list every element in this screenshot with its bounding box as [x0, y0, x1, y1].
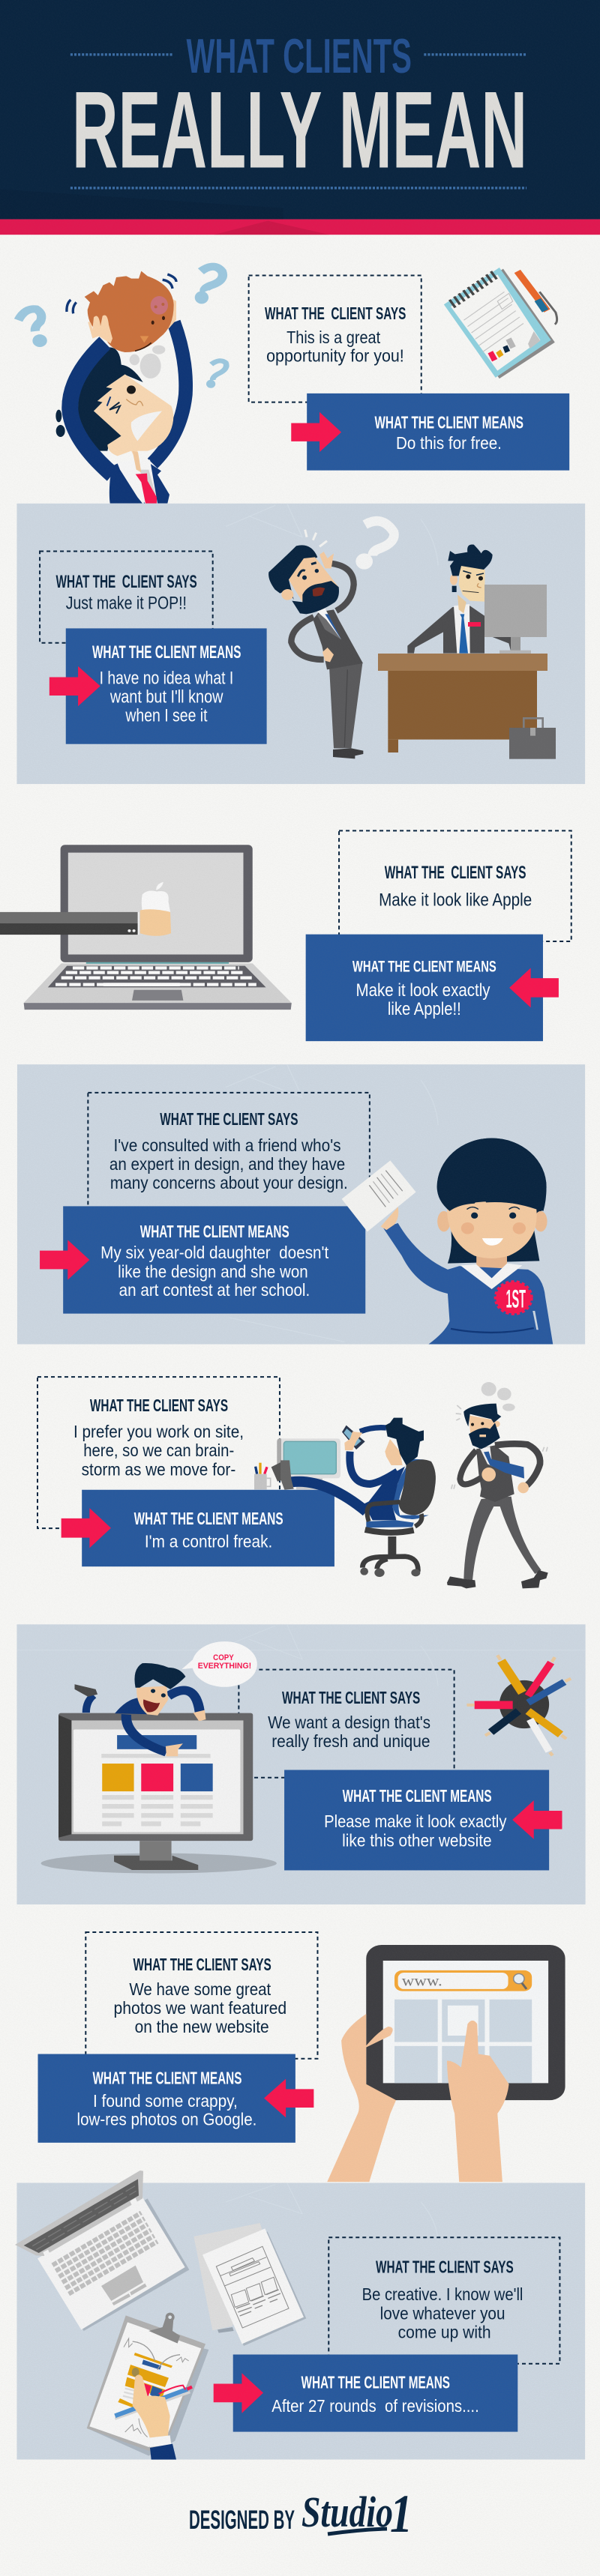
says box	[339, 830, 572, 941]
means box: I found some crappy,	[93, 2092, 238, 2111]
means box: WHAT THE CLIENT MEANS	[352, 957, 496, 975]
says text	[268, 1689, 430, 1752]
says box	[249, 275, 422, 402]
says text: many concerns about your design.	[110, 1174, 348, 1193]
means box: I have no idea what I	[100, 669, 233, 688]
says text: WHAT THE CLIENT SAYS	[265, 304, 406, 323]
means box: WHAT THE CLIENT MEANS	[343, 1786, 492, 1806]
says box	[86, 1932, 317, 2059]
means box	[38, 2054, 296, 2143]
says text: I prefer you work on site,	[74, 1423, 244, 1442]
says text	[110, 1110, 348, 1193]
designed by text: DESIGNED BY	[189, 2506, 295, 2535]
illustration: girl holding drawing	[342, 1138, 553, 1345]
means box: I'm a control freak.	[145, 1533, 272, 1551]
means box: when I see it	[125, 706, 208, 726]
panel 7: great photos	[38, 1932, 566, 2182]
logo: studio1: 1	[390, 2484, 412, 2544]
illustration: laptop with apple	[0, 845, 292, 1010]
means box: My six year-old daughter doesn't	[100, 1243, 328, 1263]
panel 5: work on site	[38, 1377, 334, 1566]
says text: photos we want featured	[114, 1998, 286, 2018]
speech bubble: copy everything: COPY	[213, 1654, 234, 1662]
panel 3: make it look like apple	[0, 830, 572, 1041]
says box	[328, 2237, 560, 2364]
says text: come up with	[398, 2323, 491, 2342]
means box	[284, 1770, 549, 1870]
illustration: man with feet on desk	[254, 1418, 436, 1577]
header banner	[0, 0, 600, 235]
says box	[238, 1670, 454, 1778]
says text: WHAT THE CLIENT SAYS	[134, 1955, 272, 1975]
says text: opportunity for you!	[266, 347, 404, 366]
means box: WHAT THE CLIENT MEANS	[92, 643, 241, 663]
says text: WHAT THE CLIENT SAYS	[160, 1110, 298, 1129]
illustration: angry bearded man	[447, 1382, 548, 1588]
illustration: monitor with man climbing	[41, 1663, 277, 1873]
panel 4: consulted with a friend	[17, 1064, 585, 1345]
illustration: tablet with hands	[327, 1945, 566, 2182]
panel 1: this is a great opportunity	[249, 268, 569, 471]
says text: here, so we can brain-	[83, 1441, 234, 1461]
means box	[63, 1206, 365, 1314]
illustration: wireframe sheets	[194, 2223, 306, 2346]
panel 6: fresh and unique	[16, 1624, 586, 1904]
means box: like the design and she won	[118, 1263, 308, 1282]
says text	[265, 304, 406, 366]
says text: WHAT THE CLIENT SAYS	[56, 573, 197, 592]
says text	[74, 1396, 244, 1479]
arrow	[40, 1240, 89, 1280]
arrow	[264, 2079, 314, 2117]
means box	[82, 1490, 334, 1566]
says text: I've consulted with a friend who's	[114, 1136, 341, 1156]
says text: WHAT THE CLIENT SAYS	[90, 1396, 228, 1416]
means box: After 27 rounds of revisions....	[272, 2396, 479, 2416]
means box: low-res photos on Google.	[77, 2110, 256, 2129]
footer credit	[189, 2484, 412, 2544]
arrow	[509, 968, 559, 1007]
means box: Do this for free.	[396, 434, 502, 453]
says text: love whatever you	[380, 2304, 505, 2323]
says text: on the new website	[135, 2017, 269, 2037]
illustration: girl holding drawing: 1ST	[506, 1284, 526, 1313]
logo: studio1: Studio	[302, 2488, 393, 2536]
says text	[362, 2257, 523, 2342]
arrow	[62, 1508, 111, 1548]
illustration: confused bearded man	[268, 521, 394, 758]
says text: We want a design that's	[268, 1713, 430, 1733]
icon: pencils	[466, 1655, 571, 1755]
arrow	[50, 666, 100, 706]
means box: like this other website	[342, 1831, 492, 1850]
means box: Please make it look exactly	[324, 1812, 507, 1831]
illustration: man at desk	[378, 544, 556, 759]
says box	[38, 1377, 280, 1528]
url text: www.	[402, 1973, 442, 1989]
means box	[306, 935, 543, 1041]
means box: WHAT THE CLIENT MEANS	[92, 2069, 242, 2088]
means box: WHAT THE CLIENT MEANS	[302, 2373, 450, 2392]
arrow	[512, 1800, 562, 1839]
icon: question marks	[18, 267, 226, 388]
means box: WHAT THE CLIENT MEANS	[134, 1509, 284, 1529]
says text: really fresh and unique	[272, 1732, 430, 1752]
arrow	[214, 2373, 263, 2413]
says text: Make it look like Apple	[379, 890, 532, 910]
says text: Be creative. I know we'll	[362, 2284, 523, 2304]
means box: WHAT THE CLIENT MEANS	[140, 1222, 290, 1242]
says text: This is a great	[286, 328, 380, 347]
means box	[233, 2354, 518, 2432]
says box	[88, 1093, 370, 1222]
says text	[56, 573, 197, 613]
says text: We have some great	[129, 1979, 271, 2000]
arrow	[291, 412, 341, 452]
says text: WHAT THE CLIENT SAYS	[282, 1689, 420, 1708]
means box: Make it look exactly	[356, 981, 490, 1001]
illustration: man smashing piggy bank	[56, 271, 186, 504]
means box	[66, 628, 267, 744]
says text	[114, 1955, 286, 2037]
means box	[307, 393, 569, 471]
speech bubble: copy everything: EVERYTHING!	[198, 1662, 251, 1671]
means box: an art contest at her school.	[119, 1281, 310, 1300]
means box: like Apple!!	[388, 1000, 461, 1019]
says text: storm as we move for-	[82, 1461, 236, 1479]
speech bubble: copy everything	[182, 1641, 257, 1687]
says box	[40, 552, 213, 643]
illustration: laptop from above	[15, 2171, 189, 2331]
says text: an expert in design, and they have	[110, 1155, 345, 1174]
illustration: clipboard and hand	[87, 2313, 208, 2460]
panel 2: just make it pop	[16, 504, 585, 784]
icon: notepad and pen	[444, 268, 557, 378]
says text	[379, 863, 532, 910]
panel 8: be creative	[16, 2183, 585, 2460]
means box: want but I'll know	[110, 687, 224, 707]
says text: Just make it POP!!	[66, 594, 187, 613]
